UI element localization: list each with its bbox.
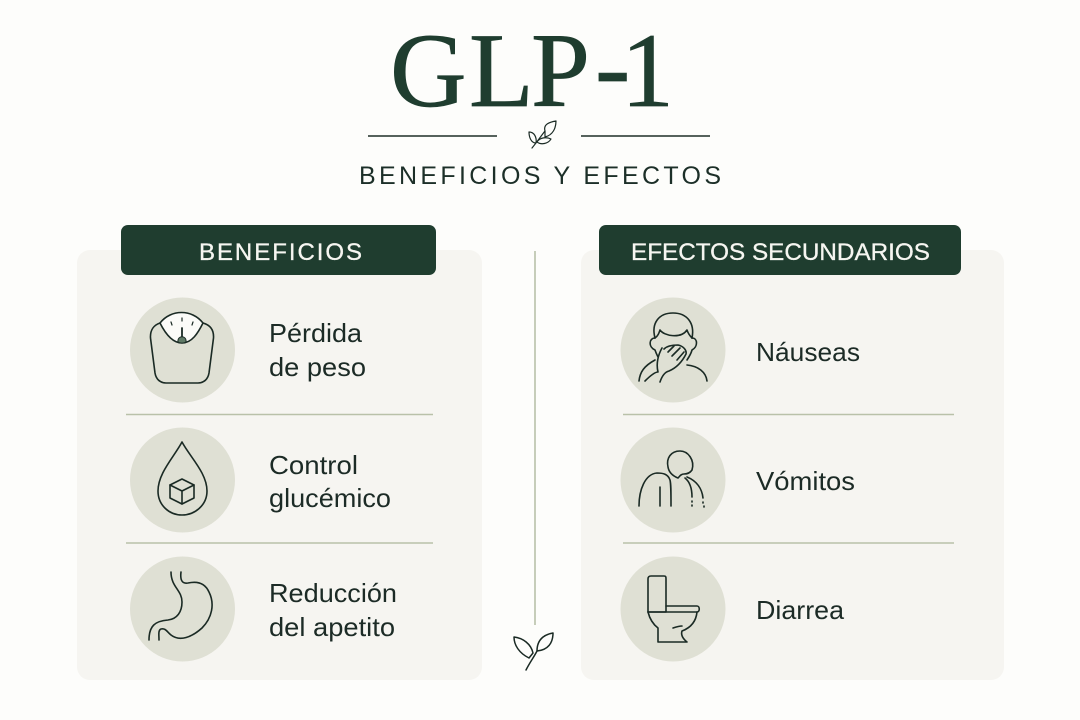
icon: toilet: [648, 576, 699, 642]
label: [269, 318, 366, 382]
label: [269, 450, 391, 513]
title ornament: lines and leaf sprig: [368, 121, 710, 148]
label: Náuseas: [756, 337, 860, 367]
row: perdida de peso: [130, 298, 366, 402]
header: efectos secundarios: [599, 225, 961, 275]
title: -: [595, 8, 630, 125]
label: Reducción: [269, 578, 397, 608]
title: L: [469, 12, 534, 129]
header: beneficios: [121, 225, 436, 275]
icon: bottom leaf sprig: [514, 633, 553, 670]
row: diarrea: [620, 556, 845, 662]
row: vomitos: [620, 428, 855, 532]
label: Control: [269, 450, 358, 480]
label: Diarrea: [756, 595, 845, 625]
icon: stomach: [149, 572, 212, 640]
header: beneficios: BENEFICIOS: [199, 239, 362, 266]
title: G: [390, 12, 467, 129]
row: control glucemico: [130, 428, 391, 532]
label: [269, 578, 397, 642]
label: Pérdida: [269, 318, 363, 348]
icon: person vomiting: [639, 451, 704, 507]
panel: beneficios: [77, 225, 482, 680]
label: del apetito: [269, 612, 395, 642]
label: de peso: [269, 352, 366, 382]
title: 1: [621, 12, 674, 129]
panel: efectos secundarios: [581, 225, 1004, 680]
icon: scale: [150, 312, 214, 383]
header: efectos secundarios: EFECTOS SECUNDARIOS: [631, 239, 930, 266]
icon: drop with sugar cube: [158, 442, 207, 515]
subtitle: BENEFICIOS Y EFECTOS: [359, 162, 721, 190]
row: nauseas: [620, 298, 860, 402]
title: P: [531, 12, 590, 129]
icon: person covering mouth: [639, 313, 707, 382]
row: reduccion del apetito: [130, 556, 397, 662]
label: glucémico: [269, 483, 391, 513]
central divider: [534, 251, 536, 625]
label: Vómitos: [756, 466, 855, 496]
